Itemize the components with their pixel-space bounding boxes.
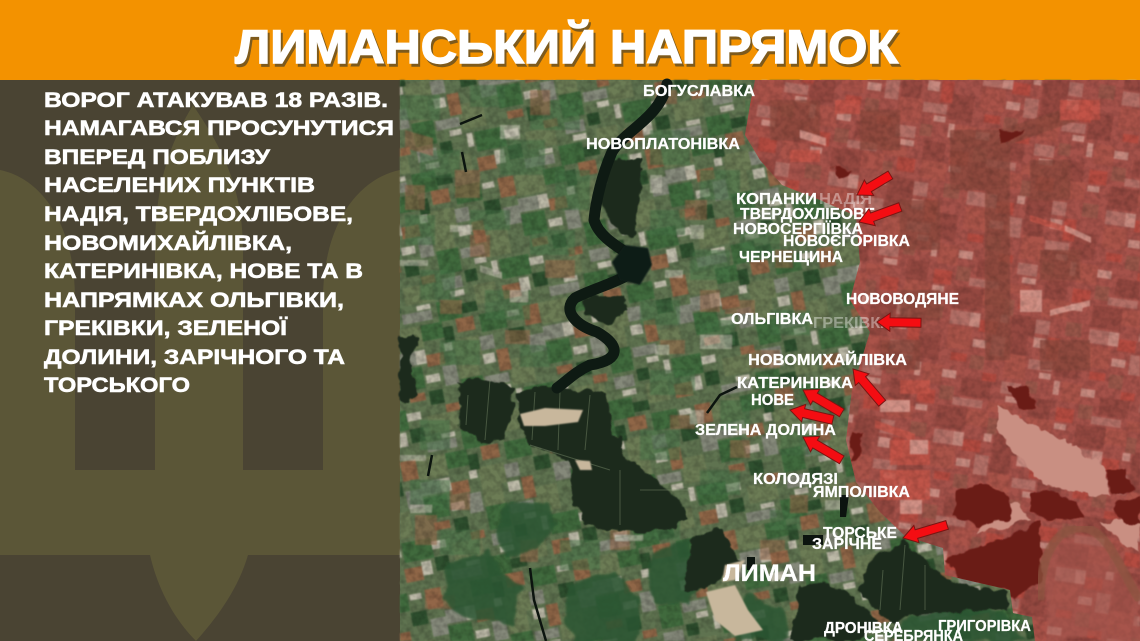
text block: summary: ГРЕКІВКИ, ЗЕЛЕНОЇ — [44, 316, 288, 340]
text block: summary: НАДІЯ, ТВЕРДОХЛІБОВЕ, — [44, 202, 353, 226]
map: settlement labels: ЗАРІЧНЕ — [812, 536, 882, 553]
map: settlement labels: БОГУСЛАВКА — [643, 83, 755, 100]
arrow: towards Nadiia — [852, 167, 895, 203]
map: mottling, occupied side — [740, 80, 1140, 641]
arrow: towards Tverdokhlibove — [856, 198, 903, 230]
map: settlement labels: ЯМПОЛІВКА — [813, 484, 910, 501]
map: settlement labels: НОВОВОДЯНЕ — [846, 291, 959, 308]
text block: summary: ТОРСЬКОГО — [44, 373, 190, 397]
map: green woodland — [440, 500, 1030, 641]
arrow: towards Novomykhailivka — [846, 363, 889, 409]
map: settlement labels: ЛИМАН — [723, 560, 816, 587]
map: settlement labels: ДРОНІВКА — [824, 620, 903, 637]
arrow: towards Zelena Dolyna — [798, 429, 846, 468]
map: occupied texture — [740, 80, 1140, 641]
map: occupied territory overlay — [740, 80, 1140, 641]
text block: summary: НАПРЯМКАХ ОЛЬГІВКИ, — [44, 288, 344, 312]
arrow: towards Katerynivka — [798, 382, 846, 421]
map: settlement labels: ЧЕРНЕЩИНА — [739, 249, 843, 266]
arrow: towards Hrekivka — [877, 313, 921, 332]
map: settlement labels: ЗЕЛЕНА ДОЛИНА — [695, 422, 836, 439]
title: ЛИМАНСЬКИЙ НАПРЯМОК — [237, 23, 900, 76]
map: settlement labels: НОВОПЛАТОНІВКА — [586, 136, 740, 153]
map: settlement labels: ТОРСЬКЕ — [823, 525, 897, 542]
map: river and reservoirs — [428, 84, 849, 641]
text block: summary: ВПЕРЕД ПОБЛИЗУ — [44, 145, 271, 169]
map: forest clearings — [466, 380, 925, 610]
map: settlement labels: НОВОЄГОРІВКА — [783, 233, 910, 250]
map: dark forests — [400, 160, 1010, 640]
text block: summary: ДОЛИНИ, ЗАРІЧНОГО ТА — [44, 345, 345, 369]
map: river corridor, occupied side — [1040, 528, 1140, 600]
map: settlement labels: КОПАНКИ — [736, 191, 817, 208]
map: settlement labels: НАДІЯ — [819, 191, 872, 208]
map: sand, occupied side — [975, 405, 1140, 552]
map: settlement labels: КАТЕРИНІВКА — [737, 375, 853, 392]
icon: trident watermark — [0, 105, 400, 641]
panel: text background — [0, 80, 400, 641]
map: farmland base — [400, 80, 1140, 641]
text block: summary: КАТЕРИНІВКА, НОВЕ ТА В — [44, 259, 363, 283]
text block: summary: НАМАГАВСЯ ПРОСУНУТИСЯ — [44, 116, 394, 140]
map: mottling — [400, 80, 1140, 641]
title: ЛИМАНСЬКИЙ НАПРЯМОК — [235, 20, 898, 73]
map: farmland fields — [400, 85, 845, 609]
map: fine field texture — [400, 80, 1140, 641]
map: lower-right plain — [1045, 535, 1140, 641]
map: settlement labels: ОЛЬГІВКА — [731, 311, 813, 328]
text block: summary: НАСЕЛЕНИХ ПУНКТІВ — [44, 173, 315, 197]
map: settlement labels: КОЛОДЯЗІ — [753, 471, 838, 488]
panel: satellite map — [400, 80, 1140, 641]
text block: summary: НОВОМИХАЙЛІВКА, — [44, 230, 292, 255]
map: settlement labels: ГРЕКІВКА — [813, 315, 892, 332]
header bar — [0, 0, 1140, 80]
text block: summary — [44, 88, 394, 397]
map: sand quarries — [520, 408, 763, 636]
map: settlement labels: НОВЕ — [751, 392, 794, 409]
arrow: towards Torske — [900, 516, 950, 547]
text block: summary: ВОРОГ АТАКУВАВ 18 РАЗІВ. — [44, 88, 388, 112]
map: settlement labels: НОВОМИХАЙЛІВКА — [748, 351, 907, 369]
map: occupied fields — [770, 100, 1100, 514]
map: red base — [740, 80, 1140, 641]
map: settlement labels: ГРИГОРІВКА — [938, 618, 1031, 635]
map: settlement labels: ТВЕРДОХЛІБОВЕ — [740, 206, 875, 223]
map: settlement labels — [586, 83, 1031, 641]
arrow: towards Nove — [788, 401, 835, 429]
map: dark forests, occupied side — [833, 130, 1140, 600]
map: settlement labels: НОВОСЕРГІЇВКА — [733, 221, 863, 238]
